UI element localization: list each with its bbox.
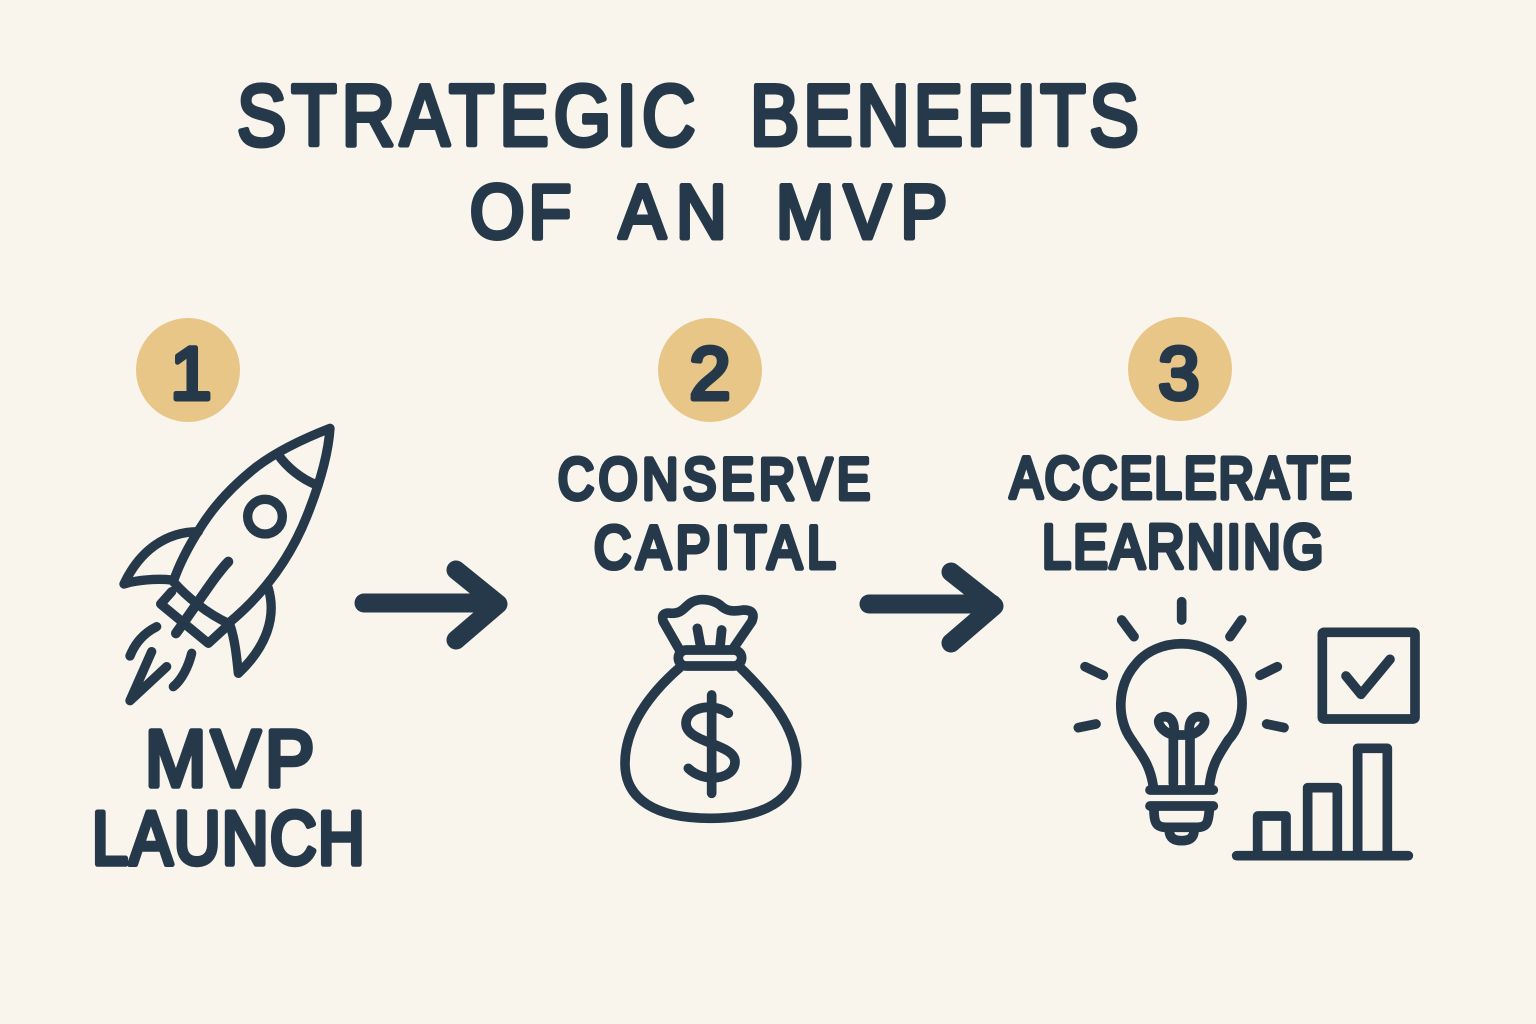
step 2 badge: 2 — [689, 332, 731, 415]
label: conserve capital — [558, 448, 870, 581]
label: accelerate learning: ACCELERATE — [1010, 447, 1352, 511]
label: accelerate learning — [1010, 447, 1352, 582]
title: AN — [619, 170, 727, 255]
arrow: conserve capital to accelerate learning — [869, 572, 994, 643]
title: MVP — [776, 170, 947, 255]
label: conserve capital: CAPITAL — [594, 513, 836, 581]
label: MVP launch: LAUNCH — [92, 796, 365, 880]
icon: rising bar chart — [1237, 748, 1408, 856]
title: BENEFITS — [750, 67, 1139, 163]
step 2 badge — [658, 318, 762, 422]
step 1 badge — [136, 318, 240, 422]
label: MVP launch: MVP — [145, 714, 314, 804]
icon: rocket — [124, 428, 330, 701]
icon: money bag — [625, 600, 797, 818]
icon: checkbox — [1322, 632, 1415, 719]
label: MVP launch — [92, 714, 365, 880]
step 1 badge: 1 — [170, 332, 212, 415]
title: OF — [470, 170, 571, 255]
title: STRATEGIC — [237, 67, 695, 163]
arrow: launch to conserve capital — [364, 570, 498, 640]
icon: light bulb — [1078, 602, 1284, 841]
label: accelerate learning: LEARNING — [1042, 513, 1323, 582]
step 3 badge — [1128, 317, 1232, 421]
label: conserve capital: CONSERVE — [558, 448, 870, 512]
title — [237, 67, 1139, 255]
step 3 badge: 3 — [1158, 332, 1200, 415]
